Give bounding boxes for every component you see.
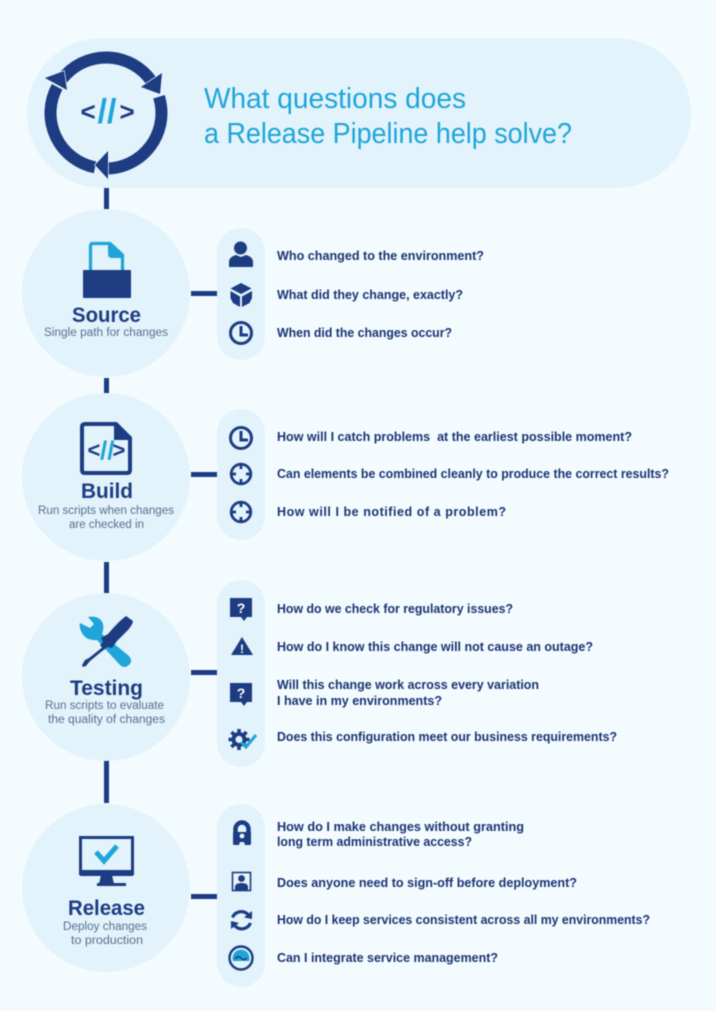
text: testing description [45,700,165,726]
text: every variation [277,678,539,708]
heading: Build: Build [81,479,133,503]
icon: padlock [233,823,251,845]
panel: source stage [22,209,190,377]
icon: wrench and screwdriver [80,616,133,667]
text: outage: How do I know this change will not cause an outage? [277,640,593,654]
heading: Release: Release [68,896,145,920]
icon: source file in folder [83,243,131,298]
icon: release cycle arrows [45,57,162,179]
icon: script file: // [100,436,114,466]
panel: testing stage [22,593,190,761]
icon: question bubble [230,598,252,621]
icon: question bubble: ? [237,600,245,616]
icon: target [230,463,252,485]
text: administrative access [277,820,524,849]
text: sign-off: Does anyone need to sign-off before deployment? [277,876,577,890]
icon: release cycle arrows: < [80,96,96,126]
text: build description: Run scripts when changes [38,505,174,517]
icon: script file: > [112,438,125,462]
icon: clock [230,322,252,344]
panel: release questions [217,804,650,987]
text: What did they change: What did they change, exactly? [277,288,463,302]
icon: question bubble: ? [237,685,245,701]
heading: Testing: Testing [70,676,143,700]
text: release description: Deploy changes [63,921,147,933]
panel: release stage [22,804,190,972]
icon: release cycle arrows: // [98,93,117,131]
icon: target [230,501,252,523]
text: every variation: Will this change work across every variation [277,678,539,692]
icon: warning triangle: ! [240,642,244,656]
panel: testing questions [217,580,617,767]
text: business requirements: Does this configuration meet our business requirements? [277,730,617,744]
icon: portrait sign-off [232,872,250,890]
panel: build stage [22,393,190,561]
text: administrative access: How do I make changes without granting [277,820,524,834]
text: regulatory: How do we check for regulatory issues? [277,602,513,616]
text: service management: Can I integrate service management? [277,951,498,965]
icon: clock [230,428,252,448]
header banner [27,38,691,188]
text: every variation: I have in my environments? [277,694,442,708]
icon: warning triangle [231,637,253,656]
text: testing description: the quality of changes [48,714,165,726]
text: notified: How will I be notified of a problem? [277,505,506,519]
icon: script file: < [88,438,100,462]
text: administrative access: long term administrative access? [277,835,472,849]
icon: monitor with check [80,838,133,886]
icon: cube [230,283,252,307]
title: a Release Pipeline help solve? [204,118,572,150]
icon: service gauge [230,946,252,970]
icon: person [229,242,253,267]
icon: gear with check [228,729,256,750]
icon: question bubble [230,683,252,706]
text: When did changes occur: When did the changes occur? [277,326,452,340]
text: consistent services: How do I keep services consistent across all my environments? [277,913,650,927]
text: release description [63,921,147,947]
text: testing description: Run scripts to evaluate [45,700,164,712]
text: release description: to production [71,935,143,947]
text: catch problems: How will I catch problems at the earliest possible moment? [277,430,632,444]
text: source description: Single path for changes [44,327,168,339]
title: What questions does [204,83,466,115]
icon: sync arrows [231,911,252,929]
title [204,83,572,150]
panel: source questions [217,228,484,360]
connector lines [104,188,217,899]
icon: release cycle arrows: > [120,96,135,126]
text: Who changed: Who changed to the environment? [277,249,484,263]
text: elements combined: Can elements be combined cleanly to produce the correct results? [277,467,669,481]
text: build description: are checked in [69,519,144,531]
text: build description [38,505,174,531]
heading: Source: Source [72,303,141,327]
icon: script file [82,423,131,473]
panel: build questions [217,409,669,540]
